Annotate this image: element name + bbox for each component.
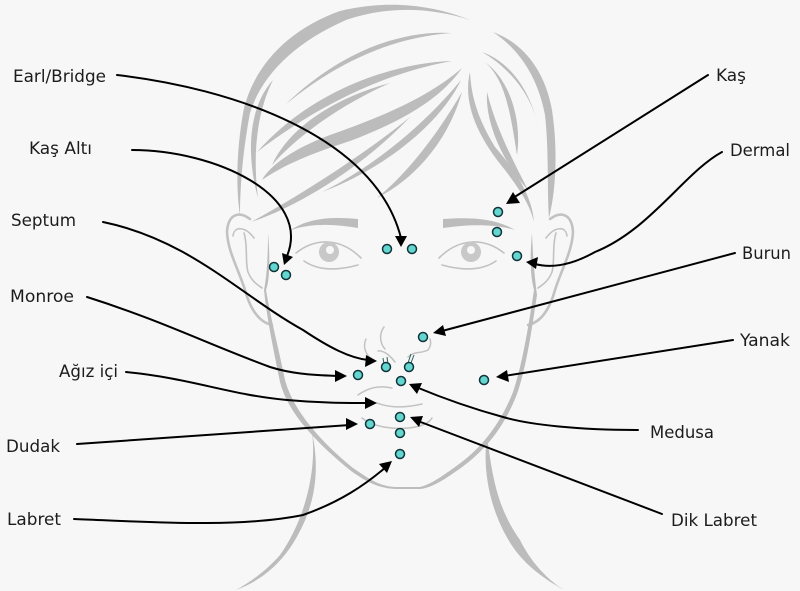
- label: Earl/Bridge: Earl/Bridge: [13, 67, 106, 87]
- label: Dik Labret: Dik Labret: [671, 511, 757, 531]
- label: Ağız içi: Ağız içi: [59, 362, 118, 382]
- label: Kaş Altı: Kaş Altı: [29, 139, 92, 159]
- hair: left strands: [251, 33, 462, 222]
- arrow: Yanak: [496, 340, 733, 382]
- arrow: Dudak: [77, 418, 358, 444]
- label: Yanak: Yanak: [739, 331, 790, 351]
- arrow: Dik Labret: [410, 416, 662, 514]
- nose: [365, 327, 431, 362]
- label: Monroe: Monroe: [10, 287, 74, 307]
- right eyebrow: [443, 218, 515, 230]
- hair: right strands: [468, 52, 538, 222]
- label: Kaş: Kaş: [716, 66, 746, 86]
- labels: [6, 66, 791, 531]
- left ear: [227, 215, 272, 325]
- arrow: Dermal: [526, 152, 722, 269]
- left eye: [296, 242, 361, 269]
- right inner ear: [538, 229, 567, 288]
- hair: outer right contour: [493, 32, 556, 218]
- right eye: [439, 242, 504, 269]
- arrow: Burun: [433, 253, 735, 336]
- label: Labret: Labret: [7, 510, 61, 530]
- label: Medusa: Medusa: [650, 423, 714, 443]
- label: Septum: Septum: [11, 211, 76, 231]
- label: Dudak: Dudak: [6, 437, 60, 457]
- left eyebrow: [291, 218, 358, 230]
- arrow: Labret: [74, 461, 392, 523]
- neck right: [486, 437, 564, 590]
- arrow: Ağız içi: [126, 372, 377, 409]
- hair: outer left contour: [237, 5, 470, 215]
- arrow: Kaş Altı: [132, 150, 293, 265]
- nostril rings: [383, 354, 414, 364]
- arrow: Earl/Bridge: [117, 75, 407, 247]
- arrow: Medusa: [409, 383, 638, 430]
- neck left: [236, 432, 316, 590]
- piercing dots: [270, 208, 522, 458]
- lips: [358, 387, 432, 428]
- label: Dermal: Dermal: [730, 141, 790, 161]
- arrows: [74, 75, 735, 523]
- arrow: Monroe: [87, 297, 347, 382]
- right ear: [528, 215, 573, 325]
- arrow: Kaş: [506, 75, 708, 204]
- illustration: face outline: [227, 5, 573, 590]
- arrow: Septum: [103, 222, 377, 367]
- jaw and chin: [264, 233, 537, 489]
- left inner ear: [233, 229, 262, 288]
- label: Burun: Burun: [742, 244, 791, 264]
